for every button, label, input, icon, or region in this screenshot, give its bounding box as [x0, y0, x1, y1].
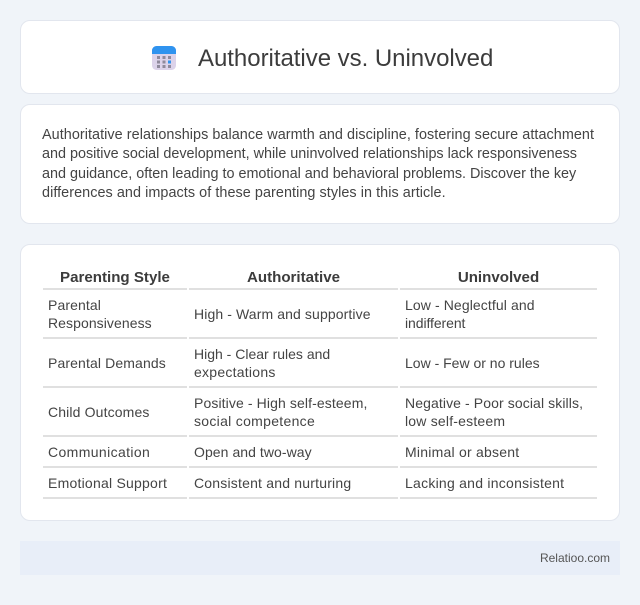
- row: communication: Open and two-way: [194, 444, 312, 460]
- row: parental demands: [48, 346, 540, 380]
- row: communication: Minimal or absent: [405, 444, 519, 460]
- row: emotional support: Lacking and inconsistent: [405, 475, 564, 491]
- row: child outcomes: low self-esteem: [405, 413, 505, 429]
- intro text: and positive social development, while uninvolved relationships lack responsiveness: [42, 146, 577, 162]
- row: parental demands: High - Clear rules and: [194, 346, 330, 362]
- intro text: Authoritative relationships balance warmth and discipline, fostering secure attachment: [42, 127, 594, 143]
- row: parental demands: expectations: [194, 364, 276, 380]
- comparison table: [43, 269, 597, 499]
- row: emotional support: Consistent and nurturing: [194, 475, 351, 491]
- intro text: [42, 127, 594, 201]
- row: parental responsiveness: [48, 297, 535, 331]
- row: parental responsiveness: Responsiveness: [48, 315, 152, 331]
- row: communication: Communication: [48, 444, 150, 460]
- table header: Authoritative: [247, 269, 340, 286]
- icon: calendar: [152, 46, 176, 70]
- intro text: and guidance, often leading to emotional and behavioral problems. Discover the key: [42, 166, 576, 182]
- row: parental demands: Low - Few or no rules: [405, 355, 540, 371]
- title panel: [20, 20, 620, 94]
- footer credit: Relatioo.com: [540, 551, 610, 565]
- table header: Uninvolved: [458, 269, 539, 286]
- row: child outcomes: [48, 395, 583, 429]
- row: child outcomes: Positive - High self-esteem,: [194, 395, 367, 411]
- row: child outcomes: social competence: [194, 413, 315, 429]
- intro text: differences and impacts of these parenting styles in this article.: [42, 185, 446, 201]
- table header: [60, 269, 539, 286]
- row: parental responsiveness: Parental: [48, 297, 101, 313]
- row: communication: [48, 444, 520, 460]
- comparison table panel: [20, 244, 620, 521]
- row: parental responsiveness: indifferent: [405, 315, 465, 331]
- row: child outcomes: Child Outcomes: [48, 404, 150, 420]
- row: emotional support: Emotional Support: [48, 475, 167, 491]
- intro panel: [20, 104, 620, 224]
- row: emotional support: [48, 475, 564, 491]
- row: parental responsiveness: Low - Neglectful and: [405, 297, 535, 313]
- row: child outcomes: Negative - Poor social skills,: [405, 395, 583, 411]
- title heading: Authoritative vs. Uninvolved: [198, 45, 493, 72]
- row: parental demands: Parental Demands: [48, 355, 166, 371]
- footer bar: [20, 541, 620, 575]
- table header: Parenting Style: [60, 269, 170, 286]
- row: parental responsiveness: High - Warm and supportive: [194, 306, 371, 322]
